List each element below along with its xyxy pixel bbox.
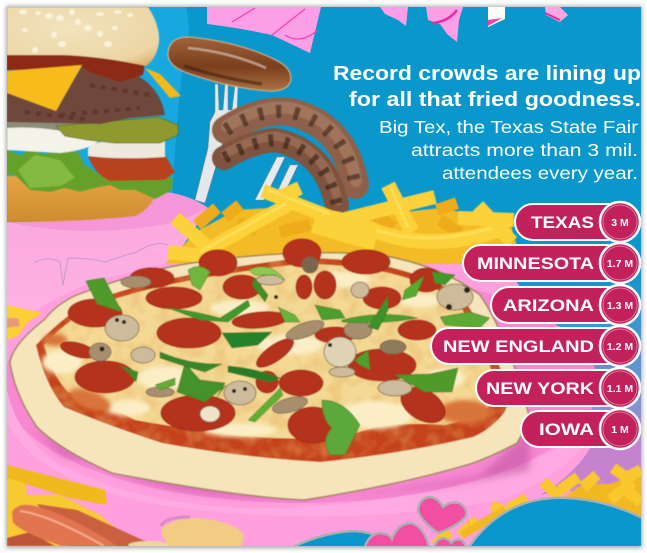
body text: attracts more than 3 mil. xyxy=(411,140,638,160)
row: New York xyxy=(476,368,640,408)
crust xyxy=(10,253,530,500)
mushrooms xyxy=(89,257,473,422)
headline: Record crowds are lining up xyxy=(333,63,641,85)
crust browning xyxy=(43,334,491,424)
fries bottom right xyxy=(435,468,641,545)
row: Arizona: ARIZONA xyxy=(503,296,594,315)
pink lower stage xyxy=(2,250,641,553)
cheese highlights xyxy=(42,272,465,437)
grilled sausages pair xyxy=(224,107,356,205)
row: Texas: 3 M xyxy=(611,217,629,229)
onion left xyxy=(7,128,100,153)
row: Iowa: IOWA xyxy=(539,420,594,439)
sesame seeds xyxy=(19,9,133,53)
row: New England: NEW ENGLAND xyxy=(443,337,594,356)
grey onion edge xyxy=(7,121,79,132)
row: New England: 1.2 M xyxy=(607,341,633,353)
pepperoni slices xyxy=(59,239,451,443)
pizza xyxy=(0,239,540,505)
row: Minnesota xyxy=(463,243,640,283)
grilled sausage top xyxy=(168,37,291,91)
fries behind pizza xyxy=(165,185,522,264)
pizza shadow xyxy=(30,425,530,497)
hamburger xyxy=(7,7,181,222)
row: Arizona: 1.3 M xyxy=(607,300,633,312)
body text: Big Tex, the Texas State Fair xyxy=(379,117,638,137)
lettuce xyxy=(7,150,173,199)
row: Arizona xyxy=(491,285,640,325)
mushroom gills xyxy=(100,287,470,393)
pink cake tier xyxy=(7,192,208,335)
lettuce highlight xyxy=(18,155,75,188)
blue mound right xyxy=(468,496,641,546)
patty xyxy=(7,66,165,124)
body text xyxy=(379,117,638,183)
fries bottom left xyxy=(7,465,120,546)
cheese xyxy=(7,65,82,111)
cheese xyxy=(44,264,498,439)
row: Iowa: 1 M xyxy=(611,424,629,436)
ranking: states by attendance xyxy=(431,202,640,449)
row: Texas: TEXAS xyxy=(531,213,594,232)
row: New York: NEW YORK xyxy=(486,379,595,398)
forks xyxy=(195,84,298,203)
tomato xyxy=(88,155,175,181)
headline: for all that fried goodness. xyxy=(349,89,641,111)
row: New York: 1.1 M xyxy=(607,383,633,395)
headline xyxy=(333,63,641,111)
burger layers xyxy=(7,7,181,222)
body text: attendees every year. xyxy=(442,163,638,183)
top bun xyxy=(7,7,159,66)
row: Minnesota: 1.7 M xyxy=(607,258,633,270)
cheese corner xyxy=(145,68,181,98)
hot dogs xyxy=(7,504,147,548)
pizza texture xyxy=(38,260,506,461)
row: New England xyxy=(431,326,640,366)
row: Minnesota: MINNESOTA xyxy=(477,254,594,273)
patty texture xyxy=(25,85,150,120)
sauce ring xyxy=(36,258,510,462)
ketchup xyxy=(7,55,145,82)
green peppers xyxy=(86,266,490,455)
row: Iowa xyxy=(521,409,640,449)
lighter blue backdrop xyxy=(7,7,189,230)
torn pink paper pieces xyxy=(207,7,568,53)
hearts xyxy=(364,496,468,546)
fries left of pizza xyxy=(7,305,42,340)
row: Texas xyxy=(515,202,640,242)
bottom bun xyxy=(7,176,156,222)
blue mound left xyxy=(292,530,374,546)
tater tots xyxy=(128,517,244,549)
onion right xyxy=(88,138,165,158)
pickle xyxy=(56,117,178,143)
background xyxy=(172,7,641,516)
